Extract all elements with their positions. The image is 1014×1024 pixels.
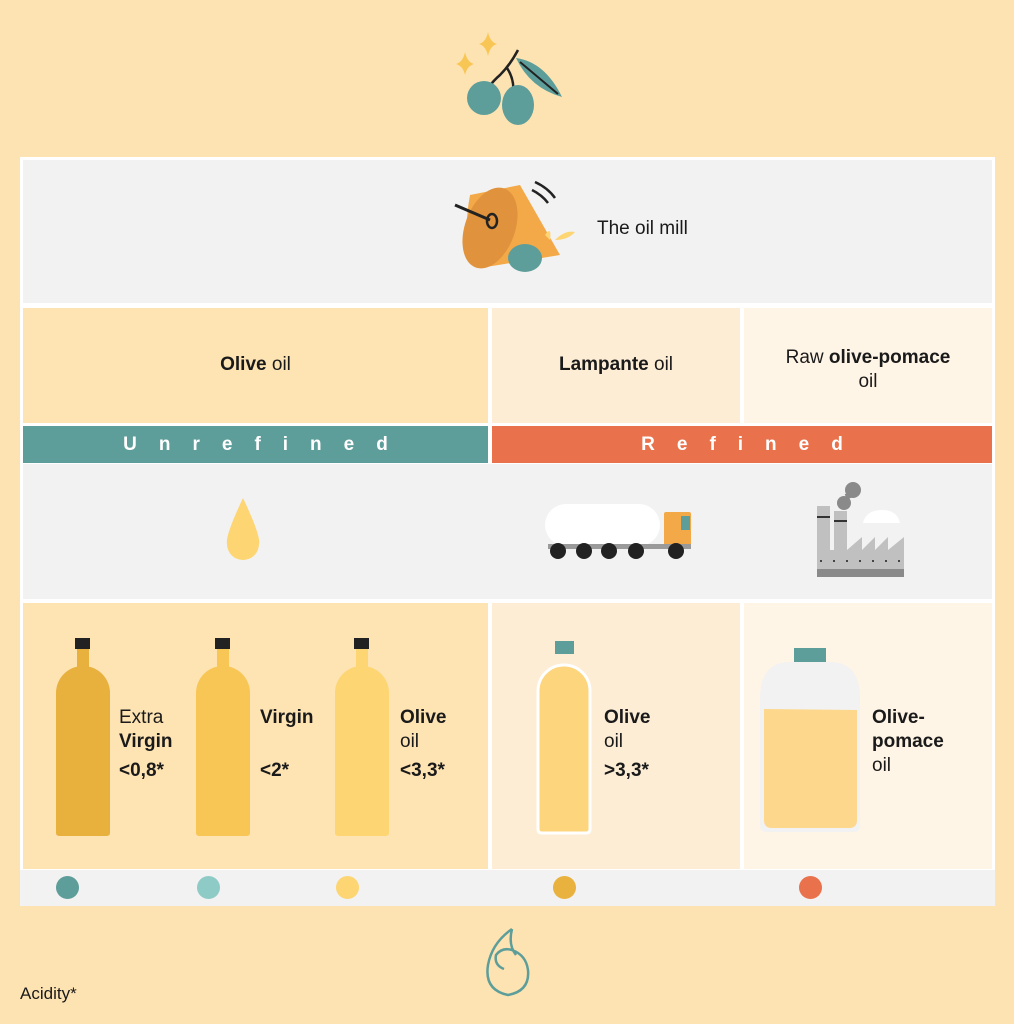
label: virgin — [260, 707, 314, 781]
panel: oil mill — [23, 160, 992, 303]
bottle: virgin — [196, 638, 250, 836]
label: refined olive oil: oil — [604, 731, 623, 752]
label: pomace: oil — [872, 755, 891, 776]
cell: unrefined bottles — [23, 603, 488, 869]
label: pomace — [872, 707, 944, 776]
label: olive oil: <3,3* — [400, 760, 445, 781]
label: extra virgin — [119, 707, 172, 781]
label: pomace: Olive- — [872, 707, 925, 728]
text: oil mill: The oil mill — [597, 218, 688, 239]
bottle: refined — [536, 641, 592, 834]
cell: olive oil: Olive oil — [220, 354, 291, 375]
icon: truck — [545, 504, 691, 559]
label: virgin: Virgin — [260, 707, 314, 728]
label: olive oil — [400, 707, 446, 781]
label: refined olive oil — [604, 707, 650, 781]
label: olive oil: oil — [400, 731, 419, 752]
label: extra virgin: Extra — [119, 707, 163, 728]
cell: pomace — [744, 603, 992, 869]
label: extra virgin: Virgin — [119, 731, 172, 752]
cell: refined olive oil — [492, 603, 740, 869]
icon: factory — [817, 482, 904, 577]
label: extra virgin: <0,8* — [119, 760, 164, 781]
icon: drop — [226, 498, 260, 560]
label: refined olive oil: >3,3* — [604, 760, 649, 781]
icons row — [23, 464, 992, 599]
jug: pomace — [760, 648, 860, 832]
legend: acidity dots — [20, 870, 995, 906]
cell: raw pomace: Raw olive-pomace — [786, 347, 950, 368]
bar: unrefined: Unrefined — [123, 434, 410, 455]
label: refined olive oil: Olive — [604, 707, 650, 728]
label: pomace: pomace — [872, 731, 944, 752]
bar: refined — [492, 426, 992, 463]
icon: mill — [454, 180, 575, 272]
panel frame — [20, 157, 995, 906]
cell: olive oil — [23, 308, 488, 423]
text: acidity: Acidity* — [20, 984, 77, 1003]
bar: refined: Refined — [641, 434, 865, 455]
icon: logo — [486, 928, 530, 996]
bar: unrefined — [23, 426, 488, 463]
bottle: extra virgin — [56, 638, 110, 836]
icon: olives branch — [456, 32, 562, 125]
cell: lampante: Lampante oil — [559, 354, 673, 375]
cell: raw pomace — [744, 308, 992, 423]
cell: raw pomace: oil — [858, 371, 878, 392]
cell: lampante — [492, 308, 740, 423]
bottle: olive oil — [335, 638, 389, 836]
label: virgin: <2* — [260, 760, 289, 781]
label: olive oil: Olive — [400, 707, 446, 728]
